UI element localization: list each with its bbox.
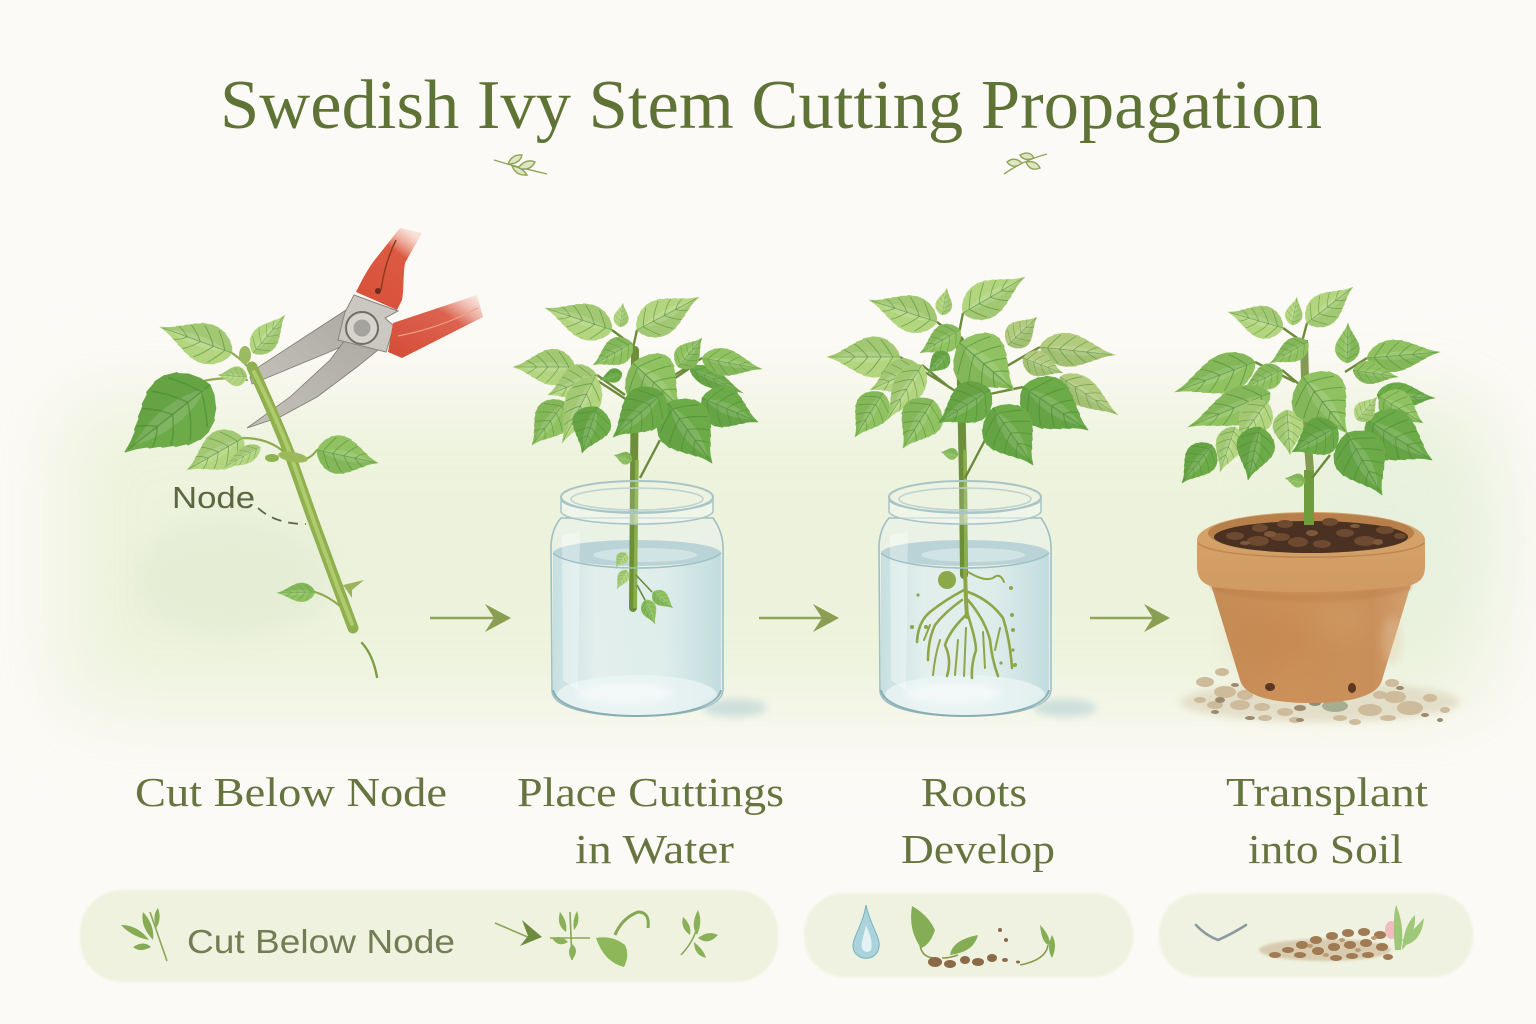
title: Swedish Ivy Stem Cutting Propagation <box>220 67 1322 144</box>
label: transplant into soil: into Soil <box>1248 826 1403 872</box>
glass jar <box>879 518 1051 716</box>
label: roots develop: Develop <box>901 826 1055 872</box>
bottom panel: transplant <box>1159 893 1473 977</box>
step 1: cutting and pruners <box>102 228 483 677</box>
node pointer <box>258 508 306 524</box>
step 4: potted plant <box>1168 274 1460 725</box>
label: place cuttings in water: Place Cuttings <box>517 769 784 815</box>
arrow 3 <box>1090 604 1170 632</box>
jar rim <box>881 481 1049 568</box>
label: transplant into soil <box>1226 769 1429 872</box>
pruners <box>247 228 483 428</box>
icon: sprig <box>681 910 718 958</box>
jar shadow <box>703 699 767 717</box>
icon: sprig <box>550 911 590 960</box>
label: roots develop <box>901 769 1055 872</box>
plant with roots <box>827 261 1126 678</box>
label: cut below node: Cut Below Node <box>135 769 447 815</box>
icon: soil mound and sprout <box>1259 905 1424 961</box>
jar rim <box>553 481 721 568</box>
icon: sprig <box>121 908 167 961</box>
bottom panel: cut below node <box>80 890 778 982</box>
icon: rooted seedlings <box>911 906 1055 968</box>
title ornament left <box>494 155 547 175</box>
label: transplant into soil: Transplant <box>1226 769 1429 815</box>
glass jar <box>551 518 723 716</box>
icon: water drop <box>853 905 879 958</box>
arrow 1 <box>430 604 511 632</box>
label: place cuttings in water <box>517 769 784 872</box>
leaves on cutting <box>102 306 382 603</box>
jar shadow <box>1033 699 1097 717</box>
cutting stem <box>200 353 353 628</box>
icon: trowel hook <box>1196 925 1246 940</box>
gravel <box>1180 668 1460 725</box>
title ornament right <box>1004 153 1047 174</box>
plant in jar <box>513 281 766 627</box>
label: place cuttings in water: in Water <box>575 826 734 872</box>
soil <box>1226 518 1406 548</box>
bottom panel: water and roots <box>804 893 1133 977</box>
bottom text: Cut Below Node <box>187 923 455 960</box>
node label: Node <box>172 480 255 515</box>
icon: small arrow <box>495 920 542 946</box>
icon: vine with leaf <box>596 912 648 967</box>
terracotta pot <box>1197 512 1425 703</box>
potted plant foliage <box>1168 274 1446 525</box>
step 2: cutting in water jar <box>513 281 767 717</box>
cut fragment <box>362 643 377 677</box>
arrow 2 <box>759 604 839 632</box>
step 3: roots developing in jar <box>827 261 1126 717</box>
roots <box>917 570 1012 678</box>
step labels <box>135 769 1429 872</box>
label: roots develop: Roots <box>921 769 1027 815</box>
